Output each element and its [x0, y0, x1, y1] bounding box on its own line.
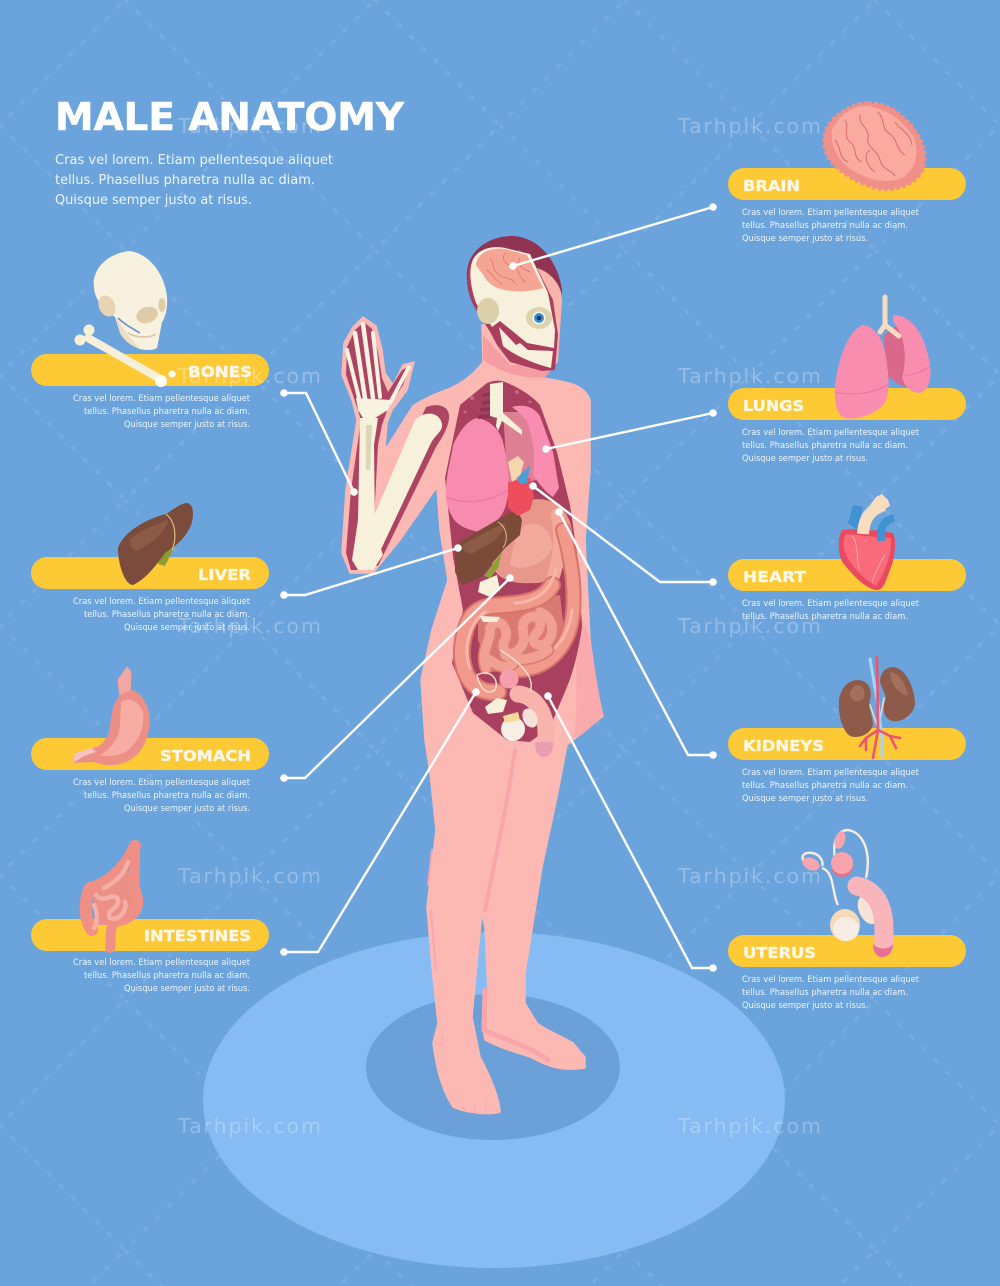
icon: brain	[824, 103, 925, 189]
leader: brain	[513, 207, 713, 266]
text: heart: tellus. Phasellus pharetra nulla ac diam.	[742, 611, 908, 621]
watermarks: Tarhpik.com	[177, 364, 321, 388]
panel: kidneys	[728, 657, 966, 803]
watermarks: Tarhpik.com	[677, 614, 821, 638]
bladder	[500, 670, 518, 688]
text: liver: Cras vel lorem. Etiam pellentesque aliquet	[73, 596, 251, 606]
liver in body	[455, 509, 522, 585]
eye	[526, 307, 552, 329]
leader: kidneys	[559, 512, 713, 755]
thorax dots	[464, 390, 532, 414]
watermarks: Tarhpik.com	[177, 864, 321, 888]
text: uterus: tellus. Phasellus pharetra nulla ac diam.	[742, 987, 908, 997]
leader: lungs	[546, 413, 713, 449]
text: intestines	[73, 957, 251, 993]
text: liver	[73, 596, 251, 632]
skull	[470, 247, 555, 348]
watermarks: Tarhpik.com	[177, 614, 321, 638]
hanging arm shade	[574, 600, 603, 738]
text: brain: Cras vel lorem. Etiam pellentesque aliquet	[742, 207, 920, 217]
watermarks	[177, 114, 821, 1138]
text: uterus: Cras vel lorem. Etiam pellentesque aliquet	[742, 974, 920, 984]
icon: heart	[839, 494, 895, 590]
text: brain	[742, 207, 920, 243]
head skin	[537, 268, 562, 368]
text: bones	[73, 393, 251, 429]
leader dots	[280, 203, 717, 972]
intro text	[55, 153, 333, 208]
stomach	[492, 499, 572, 583]
exposed brain	[476, 249, 543, 291]
text: stomach: Quisque semper justo at risus.	[124, 803, 250, 813]
icon: kidneys	[839, 657, 915, 758]
large intestine	[462, 530, 574, 692]
text: brain: Quisque semper justo at risus.	[742, 233, 868, 243]
text: bones: Cras vel lorem. Etiam pellentesque aliquet	[73, 393, 251, 403]
text: bones: tellus. Phasellus pharetra nulla ac diam.	[84, 406, 250, 416]
text: lungs: tellus. Phasellus pharetra nulla ac diam.	[742, 440, 908, 450]
text: kidneys	[742, 767, 920, 803]
mediastinum	[503, 412, 536, 488]
heading: bones: BONES	[188, 363, 252, 381]
watermarks: Tarhpik.com	[677, 864, 821, 888]
panel: stomach	[31, 667, 269, 813]
panel: liver	[31, 503, 269, 632]
heading: heart: HEART	[743, 568, 806, 586]
heading: stomach: STOMACH	[160, 747, 251, 765]
spine and trachea	[478, 382, 522, 435]
leg crease and foot shading	[428, 750, 548, 1112]
text: lungs: Cras vel lorem. Etiam pellentesque aliquet	[742, 427, 920, 437]
body cavity	[445, 381, 582, 742]
floor platform	[203, 932, 785, 1268]
raised arm muscle	[346, 322, 410, 570]
leader: uterus	[548, 696, 713, 968]
upper arm bone	[366, 414, 442, 560]
text: lungs: Quisque semper justo at risus.	[742, 453, 868, 463]
heart in body	[508, 456, 534, 516]
skull outline	[468, 247, 558, 371]
icon: uterus	[800, 830, 893, 957]
reproductive organs	[477, 650, 553, 757]
heading: liver: LIVER	[198, 566, 251, 584]
icon: stomach	[73, 667, 150, 765]
text: stomach: Cras vel lorem. Etiam pellentesque aliquet	[73, 777, 251, 787]
watermarks: Tarhpik.com	[677, 1114, 821, 1138]
small intestine	[484, 612, 552, 668]
text: uterus	[742, 974, 920, 1010]
leader: heart	[533, 486, 713, 582]
intro text: Cras vel lorem. Etiam pellentesque aliquet	[55, 153, 333, 168]
lungs in body	[446, 406, 559, 532]
leader: stomach	[284, 578, 510, 778]
text: brain: tellus. Phasellus pharetra nulla ac diam.	[742, 220, 908, 230]
text: intestines: tellus. Phasellus pharetra nulla ac diam.	[84, 970, 250, 980]
heading: lungs: LUNGS	[743, 397, 804, 415]
icon: skull and bone	[74, 251, 176, 387]
intro text: Quisque semper justo at risus.	[55, 193, 252, 208]
text: stomach	[73, 777, 251, 813]
leader: bones	[284, 393, 354, 492]
forearm bones	[352, 418, 383, 570]
intro text: tellus. Phasellus pharetra nulla ac diam.	[55, 173, 315, 188]
heading: kidneys: KIDNEYS	[743, 737, 824, 755]
text: lungs	[742, 427, 920, 463]
watermarks: Tarhpik.com	[177, 114, 321, 138]
watermarks: Tarhpik.com	[677, 114, 821, 138]
hand bones	[347, 324, 409, 403]
pelvic bones	[478, 575, 507, 714]
panel: brain	[728, 103, 966, 243]
text: kidneys: Cras vel lorem. Etiam pellentesque aliquet	[742, 767, 920, 777]
panel: lungs	[728, 297, 966, 463]
text: stomach: tellus. Phasellus pharetra nulla ac diam.	[84, 790, 250, 800]
icon: lungs	[835, 297, 931, 419]
panel: bones	[31, 251, 269, 429]
heading: brain: BRAIN	[743, 177, 800, 195]
temple socket	[477, 298, 499, 324]
heading: uterus: UTERUS	[743, 944, 816, 962]
leader: intestines	[284, 692, 476, 952]
panel: uterus	[728, 830, 966, 1010]
text: kidneys: Quisque semper justo at risus.	[742, 793, 868, 803]
lower jaw	[499, 327, 553, 368]
body silhouette	[342, 317, 603, 1114]
text: uterus: Quisque semper justo at risus.	[742, 1000, 868, 1010]
intestines base	[478, 595, 565, 672]
panel: heart	[728, 494, 966, 621]
watermarks: Tarhpik.com	[177, 1114, 321, 1138]
text: kidneys: tellus. Phasellus pharetra nulla ac diam.	[742, 780, 908, 790]
leader: liver	[284, 548, 458, 595]
neck shadow	[483, 335, 555, 378]
text: liver: tellus. Phasellus pharetra nulla ac diam.	[84, 609, 250, 619]
text: bones: Quisque semper justo at risus.	[124, 419, 250, 429]
leader lines	[284, 207, 713, 968]
palm	[356, 398, 392, 418]
title: MALE ANATOMY	[55, 95, 404, 139]
watermarks: Tarhpik.com	[677, 364, 821, 388]
upper arm muscle	[362, 405, 449, 566]
text: heart	[742, 598, 920, 621]
panel: intestines	[31, 846, 269, 993]
icon: intestines	[86, 846, 138, 948]
heading: intestines: INTESTINES	[144, 927, 251, 945]
text: intestines: Cras vel lorem. Etiam pellentesque aliquet	[73, 957, 251, 967]
text: liver: Quisque semper justo at risus.	[124, 622, 250, 632]
head cut-away	[467, 236, 562, 348]
text: heart: Cras vel lorem. Etiam pellentesque aliquet	[742, 598, 920, 608]
text: intestines: Quisque semper justo at risus.	[124, 983, 250, 993]
human figure	[342, 236, 603, 1114]
icon: liver	[118, 503, 193, 585]
